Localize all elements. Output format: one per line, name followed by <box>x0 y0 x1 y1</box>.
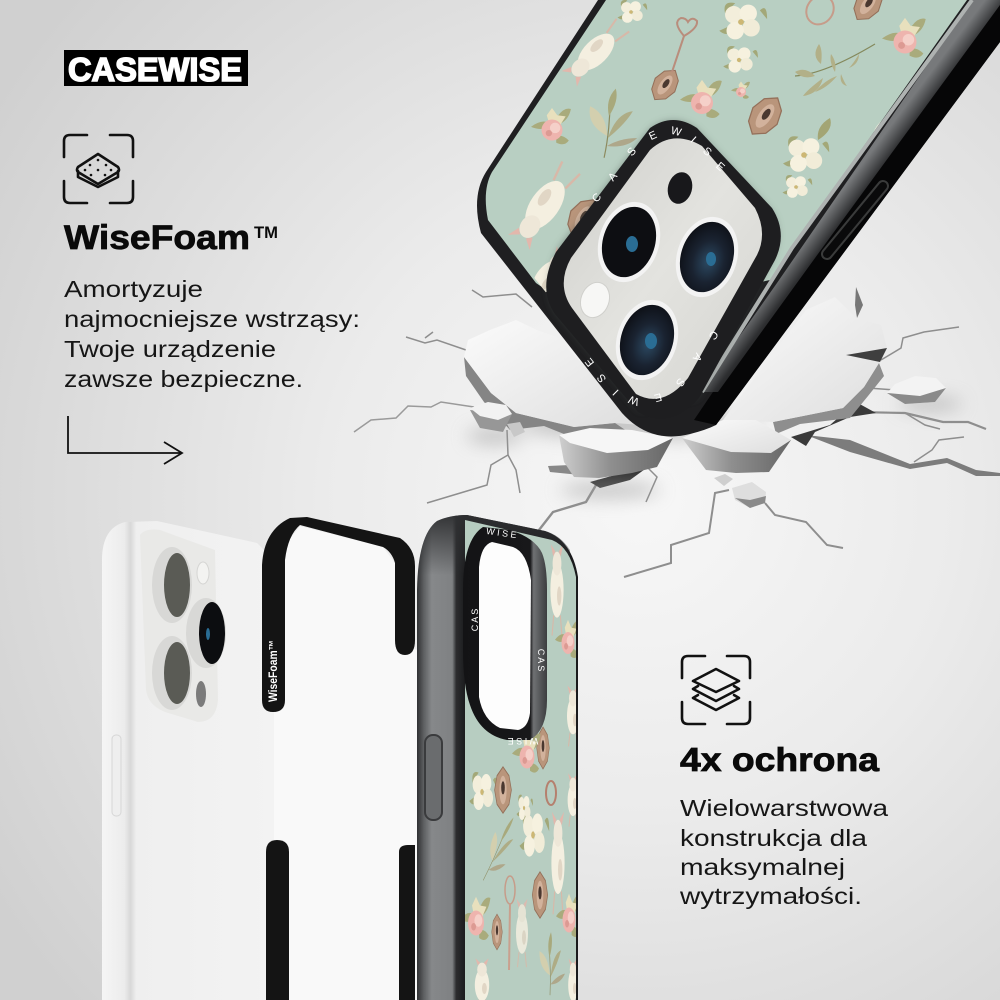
ring lettering: C A S <box>536 649 546 671</box>
right chunk <box>682 420 791 473</box>
lens 2 <box>666 209 748 305</box>
small rocks <box>470 376 946 508</box>
body text: Wielowarstwowa <box>680 795 889 821</box>
flash <box>197 562 209 584</box>
WiseFoam feature <box>64 135 360 392</box>
lens plates <box>152 547 226 710</box>
sensor <box>196 681 206 707</box>
case side <box>417 515 578 1000</box>
phone case outer <box>477 0 1000 436</box>
foam label: WiseFoam™ <box>268 640 280 702</box>
flash <box>664 169 696 207</box>
icon: layers in frame <box>682 656 750 724</box>
foam lower right bar <box>399 845 415 1000</box>
ring lettering: E <box>653 390 663 404</box>
camera cut-out <box>479 542 531 730</box>
foam top band <box>262 517 415 712</box>
side button <box>425 735 442 820</box>
band highlight <box>702 0 972 392</box>
ring lettering: S <box>700 145 714 159</box>
foam lower left bar <box>266 840 289 1000</box>
camera ring <box>546 120 781 418</box>
icon: foam pad in frame <box>64 135 133 203</box>
ring lettering <box>470 526 546 746</box>
body text: zawsze bezpieczne. <box>64 366 303 392</box>
ring lettering: W <box>669 125 683 139</box>
right slab <box>723 287 887 434</box>
body text: Twoje urządzenie <box>64 336 276 362</box>
lens right <box>199 602 225 664</box>
crack gaps <box>548 402 1000 488</box>
ring lettering: W <box>626 392 641 407</box>
side button <box>112 735 121 816</box>
ring lettering: I <box>611 387 621 397</box>
arrow <box>68 416 182 464</box>
camera ring <box>463 527 547 740</box>
cracked wall <box>354 287 1000 577</box>
ring lettering: S <box>595 371 609 385</box>
4x protection feature <box>679 656 889 909</box>
phone body <box>102 521 274 1000</box>
camera plateau <box>564 138 762 399</box>
lens top <box>164 553 190 617</box>
ring lettering: A <box>690 351 704 364</box>
side band <box>700 0 1000 392</box>
white phone <box>102 521 274 1000</box>
floral pattern <box>507 0 926 310</box>
body text: wytrzymałości. <box>679 883 862 909</box>
centre chunk <box>559 428 673 478</box>
black bumper <box>694 0 1000 425</box>
green back <box>465 520 576 1000</box>
lens 3 <box>606 292 688 388</box>
camera plateau <box>140 530 218 722</box>
ring lettering: E <box>583 355 597 369</box>
ring lettering: C A S <box>470 609 480 631</box>
case top shading <box>417 515 570 590</box>
ring lettering: C <box>706 328 720 342</box>
side button <box>827 186 883 254</box>
green back <box>486 0 967 320</box>
floral pattern <box>460 544 581 1000</box>
ring lettering: S <box>673 376 687 388</box>
body text <box>64 276 360 392</box>
top phone in case <box>477 0 1000 436</box>
mic window <box>576 278 614 322</box>
ring lettering: W I S E <box>508 736 538 746</box>
ring lettering: W I S E <box>486 526 517 540</box>
ring lettering: S <box>625 145 639 159</box>
ring lettering: A <box>606 170 620 184</box>
ring lettering: E <box>713 160 727 174</box>
left slab <box>464 320 640 440</box>
body text: maksymalnej <box>680 854 845 880</box>
body text: najmocniejsze wstrząsy: <box>64 306 360 332</box>
body text: Amortyzuje <box>64 276 203 302</box>
ring shadow <box>549 121 778 410</box>
ring lettering: E <box>647 129 659 143</box>
body text <box>679 795 889 909</box>
logo: CASEWISE: CASEWISE <box>68 51 242 88</box>
ring lettering: C <box>590 191 604 205</box>
heading: WiseFoam <box>64 219 250 257</box>
ring lettering: I <box>688 135 698 145</box>
case front view <box>417 515 581 1000</box>
body text: konstrukcja dla <box>680 825 868 851</box>
WiseFoam layer <box>262 517 417 1000</box>
ring lettering <box>583 125 727 407</box>
crack lines <box>354 290 986 577</box>
lens bottom <box>164 642 190 704</box>
lens 1 <box>588 194 670 290</box>
chunk shadows <box>467 397 962 498</box>
white foam sheet <box>274 526 417 1000</box>
heading: 4x ochrona <box>680 741 880 778</box>
trademark: TM <box>254 223 278 242</box>
